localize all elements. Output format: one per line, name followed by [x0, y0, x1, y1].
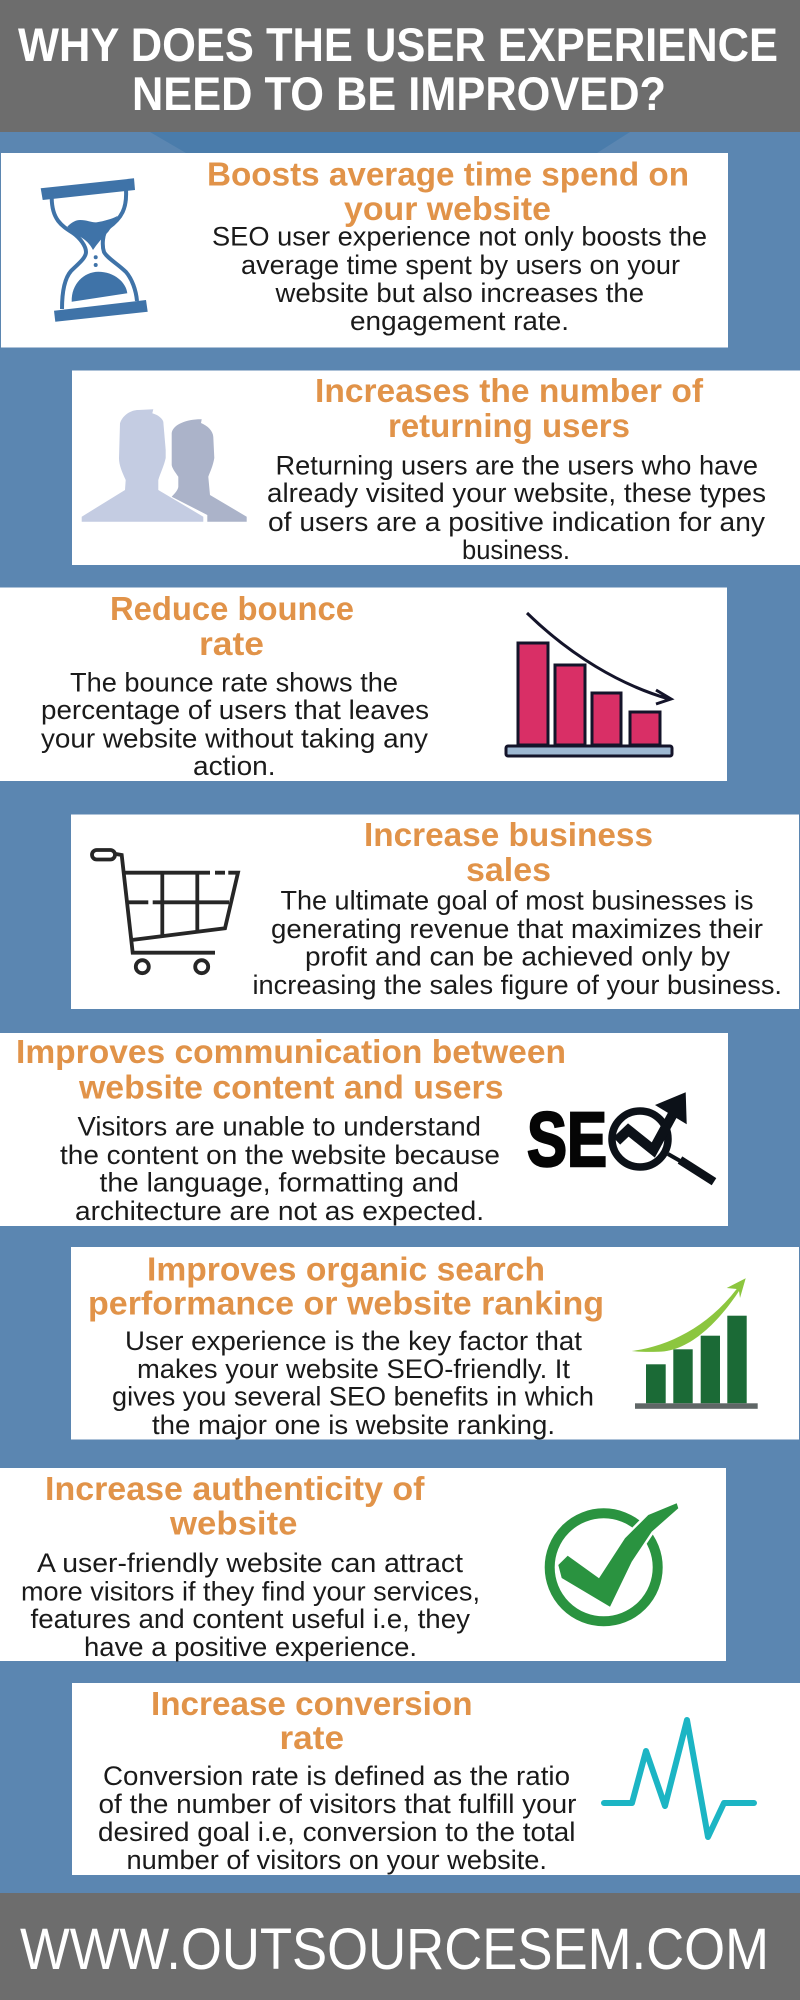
heading — [151, 1685, 472, 1756]
body text: the major one is website ranking. — [152, 1410, 555, 1440]
body text: of users are a positive indication for any — [268, 507, 766, 537]
body text — [98, 1761, 576, 1875]
heading: sales — [466, 851, 551, 888]
heading: performance or website ranking — [88, 1284, 604, 1322]
icon: shopping cart — [92, 850, 238, 973]
icon: check mark in circle — [550, 1503, 678, 1621]
body text: the content on the website because — [60, 1140, 500, 1170]
heading: website — [169, 1504, 298, 1542]
icon: rising bar chart — [632, 1278, 758, 1409]
body text: generating revenue that maximizes their — [271, 914, 763, 944]
heading: your website — [344, 190, 551, 227]
body text: Returning users are the users who have — [276, 450, 758, 480]
body text: The bounce rate shows the — [70, 668, 398, 698]
panel: communication — [0, 1033, 728, 1226]
heading: Increase authenticity of — [45, 1470, 426, 1507]
body text: The ultimate goal of most businesses is — [280, 886, 754, 916]
panel: conversion rate — [72, 1683, 800, 1875]
heading: returning users — [388, 407, 630, 444]
body text: Visitors are unable to understand — [78, 1112, 481, 1142]
panel: returning users — [72, 370, 800, 565]
panel: business sales — [71, 814, 799, 1009]
body text: have a positive experience. — [84, 1632, 417, 1662]
heading: Improves communication between — [16, 1033, 566, 1070]
body text: website but also increases the — [274, 278, 644, 308]
body text — [267, 450, 766, 565]
heading — [207, 156, 689, 227]
icon: SEO magnifier — [527, 1092, 714, 1183]
icon: falling bar chart — [506, 613, 672, 756]
body text — [112, 1326, 594, 1440]
body text — [60, 1112, 500, 1226]
body text: Conversion rate is defined as the ratio — [103, 1761, 570, 1791]
body text — [252, 886, 782, 1000]
body text: of the number of visitors that fulfill your — [98, 1789, 576, 1819]
footer band — [0, 1893, 800, 2000]
header band — [0, 0, 800, 153]
heading — [45, 1470, 426, 1542]
body text: SEO user experience not only boosts the — [212, 222, 707, 252]
heading: rate — [280, 1719, 344, 1756]
body text: desired goal i.e, conversion to the total — [98, 1817, 576, 1847]
body text: already visited your website, these types — [267, 478, 766, 508]
body text: profit and can be achieved only by — [305, 942, 731, 972]
heading: Increases the number of — [315, 372, 704, 409]
body text: number of visitors on your website. — [126, 1845, 547, 1875]
body text: features and content useful i.e, they — [30, 1604, 471, 1634]
title: NEED TO BE IMPROVED? — [132, 67, 666, 120]
body text: action. — [193, 751, 276, 781]
body text: makes your website SEO-friendly. It — [137, 1354, 570, 1384]
body text: business. — [462, 535, 570, 565]
heading: Increase conversion — [151, 1685, 472, 1722]
heading — [110, 590, 354, 662]
heading: Improves organic search — [147, 1250, 545, 1288]
body text: architecture are not as expected. — [75, 1196, 484, 1226]
body text: gives you several SEO benefits in which — [112, 1382, 594, 1412]
icon: SEO magnifier: SE — [527, 1097, 607, 1183]
heading — [315, 372, 704, 444]
icon: hourglass — [41, 178, 148, 322]
heading — [16, 1033, 566, 1106]
heading: Boosts average time spend on — [207, 156, 689, 192]
body text: User experience is the key factor that — [125, 1326, 583, 1356]
icon: two user silhouettes — [82, 409, 247, 522]
body text: more visitors if they find your services, — [21, 1576, 480, 1606]
body text: A user-friendly website can attract — [37, 1548, 464, 1578]
body text: your website without taking any — [41, 724, 429, 754]
body text: average time spent by users on your — [241, 250, 680, 280]
heading: website content and users — [78, 1068, 504, 1106]
heading: Increase business — [364, 816, 653, 853]
title — [18, 18, 778, 120]
body text: engagement rate. — [350, 306, 569, 336]
body text: the language, formatting and — [100, 1168, 459, 1198]
heading: rate — [199, 625, 264, 662]
body text — [41, 668, 429, 781]
panel: time spent — [1, 153, 728, 348]
heading — [364, 816, 653, 888]
panel: organic search — [71, 1247, 799, 1440]
panel: authenticity — [0, 1468, 726, 1662]
heading — [88, 1250, 604, 1322]
body text — [21, 1548, 480, 1662]
heading: Reduce bounce — [110, 590, 354, 627]
body text: percentage of users that leaves — [41, 695, 429, 725]
icon: pulse line — [604, 1720, 754, 1837]
body text: increasing the sales figure of your business. — [252, 970, 782, 1000]
panel: bounce rate — [0, 588, 727, 781]
body text — [212, 222, 707, 336]
